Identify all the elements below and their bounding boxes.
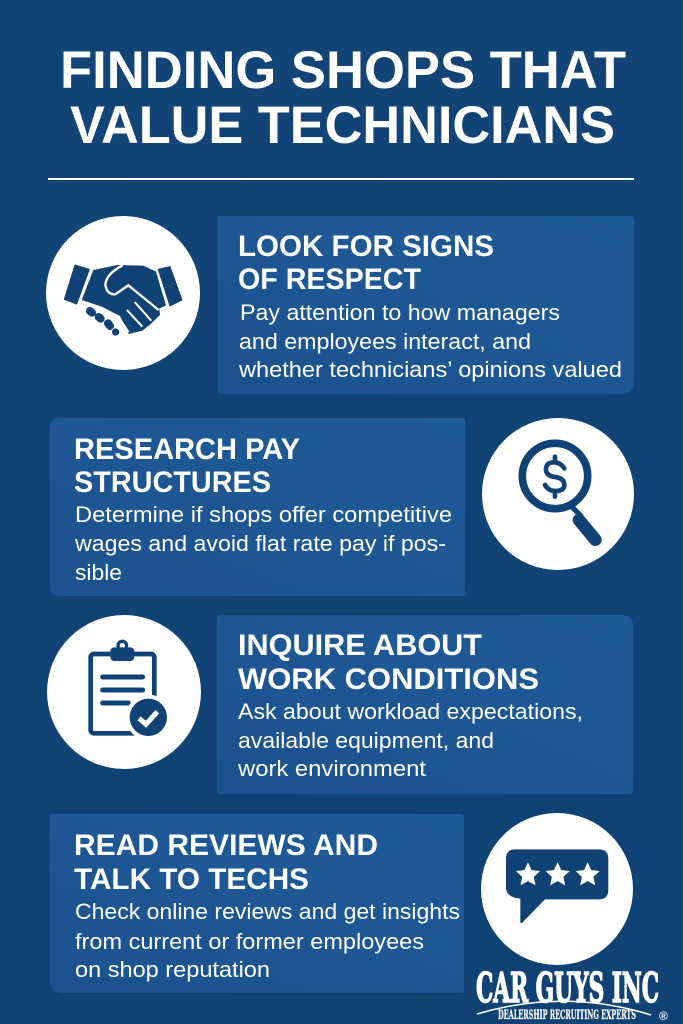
- text: research pay structures: [74, 502, 452, 585]
- title: FINDING SHOPS THAT: [60, 41, 626, 100]
- panel: inquire about work conditions: [217, 615, 633, 794]
- text: read reviews and talk to techs: from current or former employees: [75, 929, 424, 954]
- panel: look for signs of respect: [218, 216, 634, 394]
- text: inquire about work conditions: work environment: [237, 756, 427, 781]
- title: [60, 41, 626, 155]
- heading: look for signs of respect: LOOK FOR SIGNS: [238, 230, 494, 263]
- text: research pay structures: sible: [75, 560, 122, 585]
- text: look for signs of respect: and employees interact, and: [239, 329, 531, 354]
- text: read reviews and talk to techs: Check online reviews and get insights: [75, 899, 460, 924]
- text: look for signs of respect: Pay attention to how managers: [240, 300, 560, 325]
- panel: research pay structures: [50, 418, 465, 596]
- title: VALUE TECHNICIANS: [70, 96, 615, 155]
- heading: look for signs of respect: OF RESPECT: [238, 263, 421, 296]
- text: inquire about work conditions: [237, 699, 583, 781]
- text: inquire about work conditions: Ask about workload expectations,: [238, 699, 583, 724]
- heading: inquire about work conditions: INQUIRE ABOUT: [238, 629, 482, 662]
- text: look for signs of respect: whether technicians’ opinions valued: [238, 357, 622, 382]
- heading: research pay structures: STRUCTURES: [74, 466, 271, 499]
- heading: inquire about work conditions: [238, 629, 539, 696]
- heading: read reviews and talk to techs: READ REVIEWS AND: [74, 829, 378, 862]
- heading: look for signs of respect: [238, 230, 494, 296]
- heading: research pay structures: RESEARCH PAY: [74, 433, 300, 466]
- icon: clipboard with check mark: [47, 615, 201, 769]
- panel: read reviews and talk to techs: [50, 814, 464, 993]
- text: research pay structures: Determine if shops offer competitive: [75, 502, 452, 527]
- heading: research pay structures: [74, 433, 300, 499]
- heading: inquire about work conditions: WORK CONDITIONS: [238, 663, 539, 696]
- text: look for signs of respect: [238, 300, 622, 382]
- logo: Car Guys Inc: ®: [659, 1009, 668, 1023]
- text: inquire about work conditions: available equipment, and: [238, 728, 494, 753]
- heading: read reviews and talk to techs: [74, 829, 378, 896]
- text: read reviews and talk to techs: on shop reputation: [75, 957, 270, 982]
- text: research pay structures: wages and avoid flat rate pay if pos-: [74, 531, 446, 556]
- text: read reviews and talk to techs: [75, 899, 460, 982]
- heading: read reviews and talk to techs: TALK TO TECHS: [74, 863, 309, 896]
- icon: speech bubble with stars: [481, 813, 633, 965]
- icon: magnifying glass with dollar sign: [482, 418, 634, 570]
- icon: handshake: [46, 216, 200, 370]
